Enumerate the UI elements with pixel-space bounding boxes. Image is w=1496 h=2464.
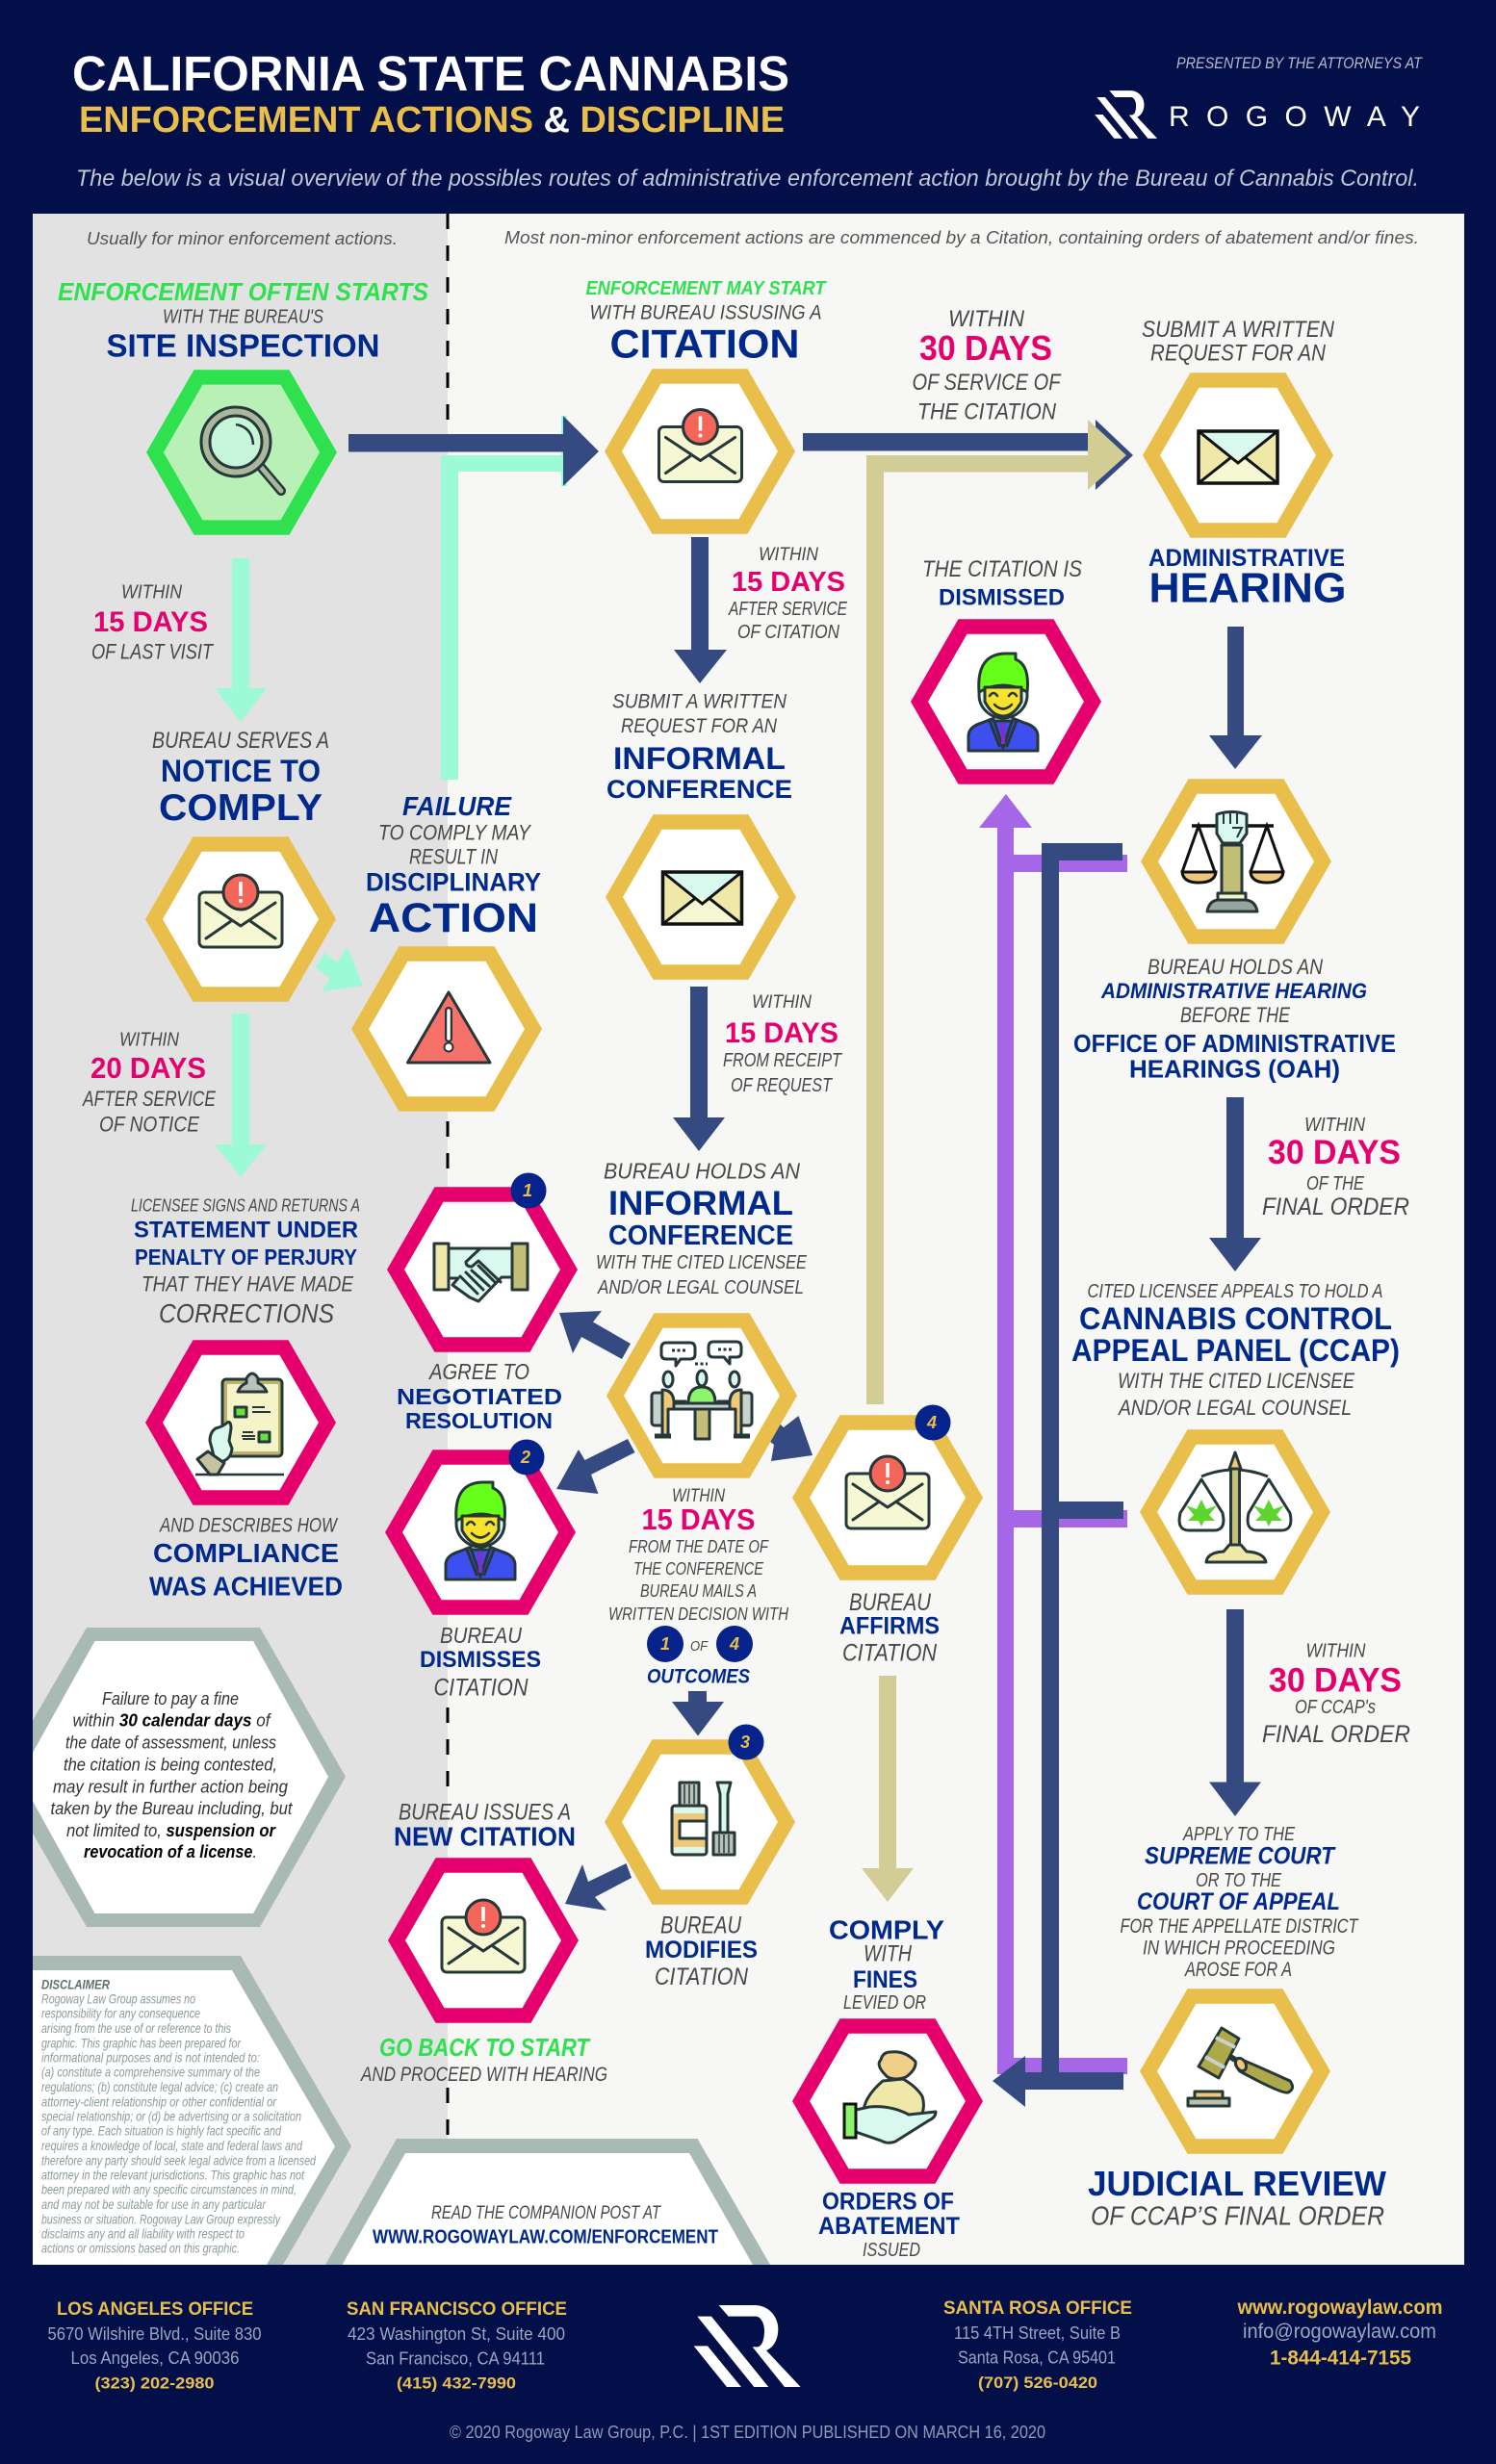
callout: disclaimer: responsibility for any consequence bbox=[41, 2006, 200, 2021]
icon: smiling person hexagon bbox=[394, 1457, 567, 1607]
office: Los Angeles: Los Angeles, CA 90036 bbox=[71, 2348, 239, 2368]
caption: AND PROCEED WITH HEARING bbox=[359, 2064, 607, 2086]
icon: cannabis scales hexagon bbox=[1148, 1437, 1322, 1587]
step: judicial review bbox=[1088, 1824, 1386, 2231]
caption: CITATION bbox=[842, 1640, 938, 1667]
callout: disclaimer: attorney-client relationship or other confidential or bbox=[41, 2093, 277, 2109]
caption: NEGOTIATED bbox=[397, 1384, 562, 1409]
panel captions: Most non-minor enforcement actions are commenced by a Citation, containing orders of abatement and/or fines. bbox=[504, 228, 1419, 247]
heading bbox=[606, 691, 792, 804]
badge 2: 2 bbox=[520, 1448, 530, 1467]
heading: TO COMPLY MAY bbox=[378, 820, 531, 845]
icon: envelope hexagon bbox=[614, 822, 787, 972]
office: Los Angeles: LOS ANGELES OFFICE bbox=[57, 2298, 253, 2320]
panel captions bbox=[87, 228, 1419, 248]
office: Santa Rosa: 115 4TH Street, Suite B bbox=[954, 2323, 1121, 2343]
callout: disclaimer: special relationship; or (d) be advertising or a solicitation bbox=[41, 2109, 301, 2124]
caption: AGREE TO bbox=[427, 1359, 529, 1384]
label: within 30 days of CCAP final order bbox=[1262, 1640, 1410, 1748]
heading: CONFERENCE bbox=[606, 775, 792, 804]
heading: THE CITATION IS bbox=[922, 556, 1082, 582]
heading: SUBMIT A WRITTEN bbox=[1142, 317, 1335, 343]
caption bbox=[645, 1912, 758, 1990]
step: citation bbox=[585, 278, 827, 526]
panel backgrounds bbox=[33, 214, 1464, 2265]
caption: MODIFIES bbox=[645, 1937, 758, 1964]
contact details bbox=[1237, 2297, 1442, 2369]
callout: disclaimer: graphic. This graphic has been prepared for bbox=[41, 2035, 242, 2050]
title bbox=[72, 46, 789, 141]
caption: CITATION bbox=[433, 1675, 529, 1702]
outcome 1: negotiated resolution bbox=[396, 1172, 569, 1433]
badge 4 bbox=[915, 1405, 951, 1440]
label: within 15 days after service of citation: WITHIN bbox=[759, 544, 819, 565]
caption: ISSUED bbox=[863, 2240, 920, 2261]
copyright: © 2020 Rogoway Law Group, P.C. | 1ST EDITION PUBLISHED ON MARCH 16, 2020 bbox=[450, 2423, 1045, 2442]
callout: failure to pay hexagon: the citation is being contested, bbox=[64, 1756, 277, 1775]
contact details: 1-844-414-7155 bbox=[1270, 2347, 1411, 2369]
label: within 20 days after service of notice: 20 DAYS bbox=[90, 1051, 206, 1085]
heading: REQUEST FOR AN bbox=[621, 715, 778, 737]
label: within 30 days of CCAP final order: 30 DAYS bbox=[1269, 1662, 1402, 1700]
caption: AFFIRMS bbox=[839, 1613, 940, 1640]
heading: CITATION bbox=[610, 321, 799, 366]
heading: AND/OR LEGAL COUNSEL bbox=[1117, 1396, 1352, 1420]
label: within 15 days decision text: THE CONFERENCE bbox=[633, 1558, 764, 1578]
label: within 30 days of the final order: WITHIN bbox=[1304, 1115, 1365, 1136]
heading: OR TO THE bbox=[1196, 1870, 1282, 1891]
arrows: navy appeal route bbox=[993, 843, 1123, 2107]
step: administrative hearing bbox=[1073, 786, 1396, 1084]
label: within 30 days of the final order: OF THE bbox=[1306, 1173, 1365, 1194]
label: within 15 days of last visit bbox=[91, 581, 214, 664]
heading: ACTION bbox=[369, 895, 538, 941]
heading: CORRECTIONS bbox=[159, 1298, 334, 1328]
icon: envelope alert hexagon bbox=[801, 1423, 974, 1573]
logo: Rogoway: ROGOWAY bbox=[1169, 101, 1420, 133]
heading: WITH THE BUREAU'S bbox=[163, 306, 324, 327]
callout: failure to pay hexagon: taken by the Bureau including, but bbox=[50, 1799, 293, 1818]
office: San Francisco bbox=[347, 2298, 567, 2393]
caption bbox=[839, 1589, 940, 1667]
step: citation dismissed bbox=[919, 556, 1093, 777]
heading: REQUEST FOR AN bbox=[1150, 341, 1327, 367]
label: within 30 days of service: OF SERVICE OF bbox=[913, 370, 1062, 396]
heading: AND/OR LEGAL COUNSEL bbox=[597, 1277, 804, 1298]
callout: disclaimer: requires a knowledge of local, state and federal laws and bbox=[41, 2138, 303, 2153]
label: within 30 days of service bbox=[913, 306, 1062, 425]
subtitle: The below is a visual overview of the possibles routes of administrative enforcement action brought by the Bureau of Cannabis Control. bbox=[76, 166, 1419, 192]
heading bbox=[152, 728, 329, 829]
outcome 3: bureau modifies citation bbox=[613, 1725, 787, 1990]
icon: magnifying glass in green hexagon bbox=[155, 377, 328, 527]
logo: Rogoway bbox=[1095, 90, 1420, 139]
heading: ENFORCEMENT MAY START bbox=[585, 278, 827, 299]
heading: BUREAU ISSUES A bbox=[399, 1800, 571, 1826]
step: comply with fines bbox=[801, 1915, 974, 2261]
heading: FOR THE APPELLATE DISTRICT bbox=[1121, 1915, 1359, 1938]
office: Los Angeles: 5670 Wilshire Blvd., Suite 830 bbox=[48, 2324, 262, 2344]
caption: COMPLIANCE bbox=[153, 1538, 339, 1568]
contact details: www.rogowaylaw.com bbox=[1237, 2297, 1442, 2319]
heading bbox=[1121, 1824, 1359, 1981]
caption: HEARINGS (OAH) bbox=[1129, 1055, 1340, 1084]
step: failure / disciplinary action bbox=[360, 791, 541, 1104]
caption: AND DESCRIBES HOW bbox=[158, 1515, 339, 1537]
callout: disclaimer: of any type. Each situation is highly fact specific and bbox=[41, 2123, 282, 2139]
callout: disclaimer: DISCLAIMER bbox=[41, 1977, 111, 1992]
title: ENFORCEMENT ACTIONS & DISCIPLINE bbox=[79, 100, 785, 141]
label: within 15 days decision text: BUREAU MAILS A bbox=[640, 1580, 757, 1601]
heading bbox=[58, 277, 429, 364]
step: cannabis control appeal panel bbox=[1071, 1281, 1400, 1587]
label: within 15 days from receipt: OF REQUEST bbox=[731, 1075, 833, 1096]
heading: SUPREME COURT bbox=[1145, 1842, 1336, 1869]
caption bbox=[818, 2189, 960, 2261]
heading: LEVIED OR bbox=[843, 1992, 926, 2014]
heading: AROSE FOR A bbox=[1183, 1959, 1292, 1981]
contact details: info@rogowaylaw.com bbox=[1243, 2321, 1436, 2343]
heading: THAT THEY HAVE MADE bbox=[142, 1272, 353, 1296]
header bbox=[72, 46, 1423, 192]
step: administrative hearing request bbox=[1142, 317, 1346, 612]
heading bbox=[1142, 317, 1335, 367]
heading: APPLY TO THE bbox=[1182, 1824, 1296, 1845]
label: within 15 days after service of citation bbox=[728, 544, 848, 643]
heading: WITH THE CITED LICENSEE bbox=[596, 1252, 808, 1273]
callout: failure to pay hexagon: not limited to, suspension or bbox=[66, 1821, 276, 1840]
callout: disclaimer: disclaims any and all liability with respect to bbox=[41, 2225, 245, 2241]
office: Santa Rosa: (707) 526-0420 bbox=[978, 2374, 1097, 2392]
callout: disclaimer: informational purposes and is not intended to: bbox=[41, 2050, 260, 2066]
label: within 30 days of CCAP final order: OF CCAP's bbox=[1295, 1697, 1376, 1718]
callout: failure to pay hexagon: Failure to pay a fine bbox=[102, 1689, 239, 1708]
icon: warning triangle hexagon bbox=[360, 954, 533, 1104]
label: within 15 days of last visit: WITHIN bbox=[121, 581, 182, 603]
icon: scales with fist hexagon bbox=[1149, 786, 1323, 937]
label: within 15 days decision text: WITHIN bbox=[672, 1486, 725, 1506]
heading: INFORMAL bbox=[613, 741, 786, 776]
callout: companion post: READ THE COMPANION POST AT bbox=[431, 2203, 661, 2223]
callout: disclaimer: and may not be suitable for use in any particular bbox=[41, 2196, 267, 2212]
heading: ENFORCEMENT OFTEN STARTS bbox=[58, 277, 429, 306]
heading: DISMISSED bbox=[939, 585, 1065, 610]
heading: WITH THE CITED LICENSEE bbox=[1118, 1369, 1354, 1393]
heading: DISCIPLINARY bbox=[366, 868, 541, 897]
callout: disclaimer: therefore any party should seek legal advice from a licensed bbox=[41, 2152, 317, 2168]
office: Santa Rosa: SANTA ROSA OFFICE bbox=[943, 2297, 1132, 2319]
label: within 15 days decision text bbox=[608, 1486, 789, 1624]
heading bbox=[596, 1159, 808, 1298]
caption: HEARING bbox=[1149, 565, 1346, 612]
heading: COURT OF APPEAL bbox=[1137, 1888, 1340, 1915]
callout: failure to pay hexagon: within 30 calendar days of bbox=[73, 1711, 271, 1731]
step: informal conference bbox=[596, 1159, 808, 1688]
heading: STATEMENT UNDER bbox=[134, 1218, 358, 1244]
badge 4: 4 bbox=[926, 1413, 937, 1432]
callout: disclaimer: been prepared with any specific circumstances in mind, bbox=[41, 2182, 297, 2197]
office: San Francisco: 423 Washington St, Suite 400 bbox=[348, 2324, 565, 2344]
icon: bottle and brush hexagon bbox=[613, 1747, 787, 1897]
caption: ABATEMENT bbox=[818, 2213, 960, 2240]
caption: BUREAU HOLDS AN bbox=[1148, 955, 1323, 979]
step: request informal conference bbox=[606, 691, 792, 972]
heading: IN WHICH PROCEEDING bbox=[1143, 1937, 1335, 1960]
label: 1 of 4 outcomes bbox=[647, 1626, 753, 1688]
callout: companion post: WWW.ROGOWAYLAW.COM/ENFORCEMENT bbox=[373, 2227, 718, 2248]
label: within 30 days of service: THE CITATION bbox=[917, 398, 1057, 425]
arrows: tan bbox=[862, 420, 1126, 1902]
caption: ORDERS OF bbox=[822, 2189, 954, 2216]
caption: ADMINISTRATIVE HEARING bbox=[1100, 979, 1367, 1003]
heading: NOTICE TO bbox=[161, 754, 321, 788]
icon: clipboard hexagon bbox=[154, 1348, 327, 1498]
heading: COMPLY bbox=[829, 1915, 944, 1944]
heading: CONFERENCE bbox=[608, 1220, 793, 1251]
outcome 2: bureau dismisses citation bbox=[394, 1440, 567, 1702]
label: within 30 days of the final order: 30 DAYS bbox=[1268, 1134, 1401, 1171]
label: within 30 days of the final order: FINAL ORDER bbox=[1262, 1194, 1409, 1220]
label: within 15 days after service of citation: 15 DAYS bbox=[732, 567, 845, 598]
office: San Francisco: SAN FRANCISCO OFFICE bbox=[347, 2298, 567, 2320]
heading bbox=[366, 791, 541, 941]
badge 1: 1 bbox=[523, 1181, 532, 1200]
heading: PENALTY OF PERJURY bbox=[135, 1245, 357, 1270]
label: within 15 days from receipt: 15 DAYS bbox=[725, 1017, 838, 1049]
callout: disclaimer bbox=[33, 1956, 351, 2265]
heading: LICENSEE SIGNS AND RETURNS A bbox=[131, 1194, 360, 1215]
label: 1 of 4 outcomes: 1 bbox=[660, 1634, 670, 1654]
caption: BUREAU bbox=[849, 1589, 932, 1616]
heading: CANNABIS CONTROL bbox=[1079, 1301, 1392, 1336]
step: statement under penalty of perjury bbox=[131, 1194, 360, 1602]
heading: BUREAU HOLDS AN bbox=[604, 1159, 800, 1184]
label: within 30 days of CCAP final order: FINAL ORDER bbox=[1262, 1721, 1410, 1748]
label: within 15 days decision text: FROM THE DATE OF bbox=[629, 1536, 769, 1556]
caption bbox=[1088, 2164, 1386, 2231]
label: within 20 days after service of notice: OF NOTICE bbox=[99, 1113, 199, 1136]
label: within 15 days from receipt bbox=[723, 991, 842, 1096]
caption: BEFORE THE bbox=[1180, 1003, 1290, 1027]
heading bbox=[585, 278, 827, 366]
caption bbox=[149, 1515, 343, 1602]
callout: companion post bbox=[325, 2139, 770, 2265]
presented by: PRESENTED BY THE ATTORNEYS AT bbox=[1176, 54, 1423, 72]
icon: envelope hexagon bbox=[1151, 380, 1325, 530]
label: within 15 days decision text: WRITTEN DECISION WITH bbox=[608, 1604, 789, 1624]
caption: WAS ACHIEVED bbox=[149, 1572, 343, 1602]
icon: envelope alert hexagon bbox=[397, 1865, 570, 2015]
heading: INFORMAL bbox=[608, 1185, 793, 1222]
step: notice to comply bbox=[152, 728, 329, 994]
heading: SUBMIT A WRITTEN bbox=[612, 691, 787, 713]
caption: GO BACK TO START bbox=[379, 2033, 591, 2062]
callout: failure to pay hexagon: revocation of a license. bbox=[84, 1842, 257, 1861]
caption: DISMISSES bbox=[420, 1647, 541, 1673]
icon: meeting table hexagon bbox=[615, 1321, 788, 1471]
label: within 15 days of last visit: 15 DAYS bbox=[93, 606, 208, 638]
callout: failure to pay hexagon: the date of assessment, unless bbox=[65, 1732, 276, 1752]
heading bbox=[131, 1194, 360, 1328]
arrows: purple dismissal route bbox=[979, 794, 1127, 2074]
label: 1 of 4 outcomes: OUTCOMES bbox=[647, 1665, 750, 1688]
label: within 15 days after service of citation: OF CITATION bbox=[737, 622, 839, 643]
label: 1 of 4 outcomes: OF bbox=[690, 1638, 709, 1655]
label: within 30 days of service: WITHIN bbox=[948, 306, 1025, 332]
heading: APPEAL PANEL (CCAP) bbox=[1071, 1333, 1400, 1368]
heading: SITE INSPECTION bbox=[106, 327, 379, 364]
outcome 4: bureau affirms citation bbox=[801, 1405, 974, 1667]
panel captions: Usually for minor enforcement actions. bbox=[87, 229, 398, 248]
badge 3: 3 bbox=[740, 1732, 750, 1752]
callout: disclaimer: actions or omissions based on this graphic. bbox=[41, 2241, 240, 2256]
callout: disclaimer: Rogoway Law Group assumes no bbox=[41, 1991, 195, 2007]
heading: COMPLY bbox=[159, 787, 322, 829]
label: within 20 days after service of notice: AFTER SERVICE bbox=[81, 1087, 216, 1111]
step: new citation bbox=[359, 1800, 607, 2086]
label: within 20 days after service of notice: WITHIN bbox=[119, 1030, 179, 1051]
caption: OFFICE OF ADMINISTRATIVE bbox=[1073, 1029, 1396, 1058]
callout: disclaimer: attorney in the relevant jurisdictions. This graphic has not bbox=[41, 2167, 305, 2182]
callout: disclaimer: business or situation. Rogoway Law Group expressly bbox=[41, 2211, 281, 2226]
badge 2 bbox=[508, 1440, 545, 1475]
office: Los Angeles: (323) 202-2980 bbox=[94, 2374, 214, 2393]
label: within 15 days decision text: 15 DAYS bbox=[641, 1502, 755, 1536]
callout: disclaimer: regulations; (b) constitute legal advice; (c) create an bbox=[41, 2079, 278, 2094]
arrows: mint bbox=[215, 416, 567, 1177]
title: CALIFORNIA STATE CANNABIS bbox=[72, 46, 789, 101]
caption: BUREAU bbox=[440, 1623, 522, 1648]
icon: smiling person hexagon bbox=[919, 627, 1093, 777]
heading: WITH BUREAU ISSUSING A bbox=[589, 302, 822, 323]
office: Los Angeles bbox=[48, 2298, 262, 2393]
office: San Francisco: (415) 432-7990 bbox=[397, 2374, 516, 2393]
label: within 15 days after service of citation: AFTER SERVICE bbox=[728, 599, 848, 620]
caption: JUDICIAL REVIEW bbox=[1088, 2164, 1386, 2203]
callout: disclaimer: arising from the use of or reference to this bbox=[41, 2020, 231, 2036]
footer bbox=[48, 2297, 1442, 2442]
label: within 30 days of CCAP final order: WITHIN bbox=[1305, 1640, 1366, 1661]
heading bbox=[922, 556, 1082, 610]
caption: BUREAU bbox=[660, 1912, 742, 1939]
caption: ADMINISTRATIVE bbox=[1148, 545, 1345, 572]
step: site inspection bbox=[58, 277, 429, 527]
heading: CITED LICENSEE APPEALS TO HOLD A bbox=[1088, 1281, 1382, 1302]
label: within 15 days from receipt: FROM RECEIPT bbox=[723, 1050, 842, 1071]
caption: RESOLUTION bbox=[405, 1408, 553, 1433]
icon: envelope alert hexagon bbox=[613, 376, 787, 526]
icon: envelope alert hexagon bbox=[154, 844, 327, 994]
callout: disclaimer: (a) constitute a comprehensive summary of the bbox=[41, 2065, 260, 2080]
label: within 30 days of service: 30 DAYS bbox=[919, 328, 1052, 368]
heading: FAILURE bbox=[402, 791, 512, 821]
callout: failure to pay hexagon bbox=[0, 1628, 346, 1927]
label: within 20 days after service of notice bbox=[81, 1030, 216, 1136]
icon: hand holding money bag hexagon bbox=[801, 2026, 974, 2176]
arrows: navy flow bbox=[348, 416, 1262, 1911]
heading: BUREAU SERVES A bbox=[152, 728, 329, 754]
heading: FINES bbox=[853, 1966, 917, 1993]
label: 1 of 4 outcomes: 4 bbox=[729, 1634, 739, 1654]
caption bbox=[1073, 955, 1396, 1084]
heading bbox=[1071, 1281, 1400, 1420]
office: Santa Rosa: Santa Rosa, CA 95401 bbox=[958, 2348, 1116, 2368]
office: San Francisco: San Francisco, CA 94111 bbox=[366, 2348, 545, 2368]
caption bbox=[359, 2033, 607, 2086]
icon: handshake hexagon bbox=[396, 1194, 569, 1345]
caption: CITATION bbox=[655, 1964, 749, 1990]
caption bbox=[397, 1359, 562, 1433]
label: within 30 days of the final order bbox=[1262, 1115, 1409, 1220]
label: within 15 days from receipt: WITHIN bbox=[752, 991, 812, 1013]
callout: failure to pay hexagon: may result in further action being bbox=[53, 1777, 288, 1796]
heading bbox=[394, 1800, 576, 1852]
label: within 15 days of last visit: OF LAST VISIT bbox=[91, 639, 214, 664]
badge 1 bbox=[510, 1172, 547, 1209]
office: Santa Rosa bbox=[943, 2297, 1132, 2392]
caption bbox=[1148, 545, 1346, 612]
heading: WITH bbox=[864, 1940, 913, 1967]
caption bbox=[420, 1623, 541, 1702]
icon: gavel hexagon bbox=[1148, 1996, 1322, 2146]
caption: OF CCAP’S FINAL ORDER bbox=[1091, 2200, 1384, 2231]
heading bbox=[829, 1915, 944, 2014]
heading: RESULT IN bbox=[409, 845, 498, 868]
badge 3 bbox=[728, 1725, 764, 1759]
logo: Rogoway mark bbox=[694, 2305, 801, 2387]
heading: NEW CITATION bbox=[394, 1822, 576, 1852]
